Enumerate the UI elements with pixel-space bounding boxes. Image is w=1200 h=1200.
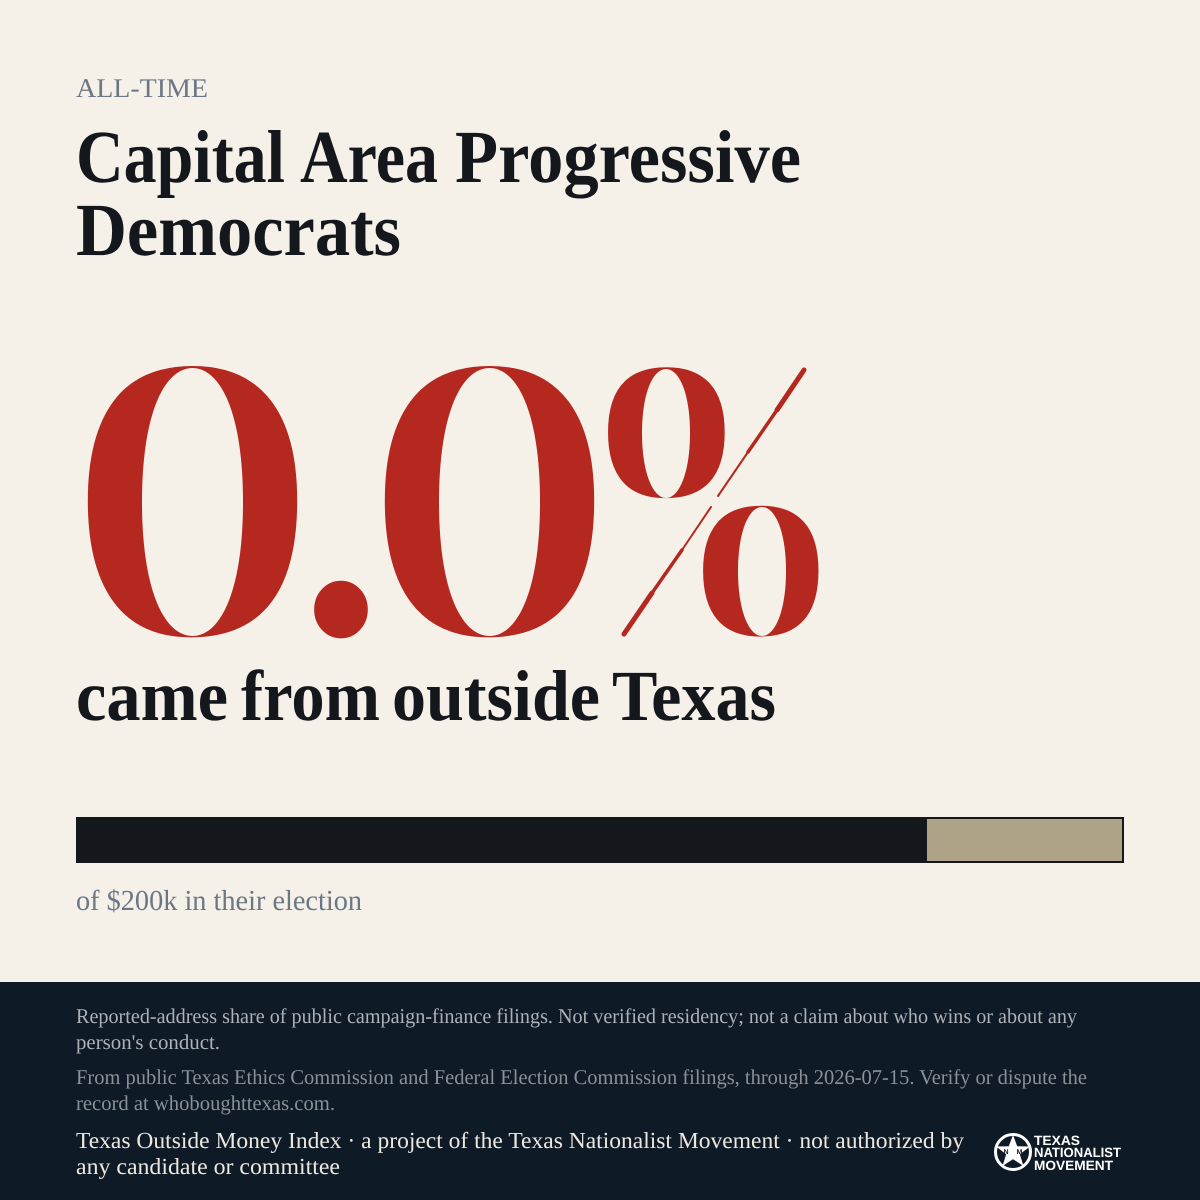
project credit: any candidate or committee xyxy=(76,1154,340,1179)
project credit xyxy=(76,1128,964,1179)
subheading: outside xyxy=(392,656,600,736)
logo wordmark: NATIONALIST xyxy=(1034,1145,1122,1160)
icon: star in circle: N xyxy=(1004,1149,1009,1156)
subheading: Texas xyxy=(612,656,776,736)
source text xyxy=(76,1065,1087,1115)
logo: Texas Nationalist Movement xyxy=(996,1133,1122,1173)
big percentage: . xyxy=(300,317,382,711)
disclaimer text xyxy=(76,1004,1077,1054)
big percentage: 0 xyxy=(366,276,613,722)
progress bar xyxy=(76,817,1124,863)
source text: From public Texas Ethics Commission and Federal Election Commission filings, through 2026-07-15. Verify or dispute the xyxy=(76,1065,1087,1089)
project credit: Texas Outside Money Index · a project of the Texas Nationalist Movement · not authorized by xyxy=(76,1128,964,1153)
footer panel xyxy=(0,982,1200,1200)
title: Progressive xyxy=(455,116,801,199)
source text: record at whoboughttexas.com. xyxy=(76,1091,335,1115)
subheading: from xyxy=(241,656,380,736)
subheading: came xyxy=(76,656,228,736)
eyebrow: time period: ALL-TIME xyxy=(76,73,208,103)
logo wordmark: TEXAS xyxy=(1034,1133,1080,1148)
disclaimer text: Reported-address share of public campaign-finance filings. Not verified residency; not a claim about who wins or about any xyxy=(76,1004,1077,1028)
big percentage: % xyxy=(570,286,937,688)
title: Democrats xyxy=(76,189,401,272)
logo wordmark: MOVEMENT xyxy=(1034,1158,1114,1173)
title: Area xyxy=(300,116,438,199)
icon: star in circle: M xyxy=(1016,1149,1022,1156)
big percentage: % xyxy=(490,310,853,711)
icon: star in circle xyxy=(996,1134,1030,1170)
big percentage xyxy=(88,366,818,638)
subheading xyxy=(76,656,776,736)
title: Capital xyxy=(76,116,285,199)
big percentage: 0 xyxy=(69,276,316,722)
disclaimer text: person's conduct. xyxy=(76,1030,220,1054)
logo wordmark xyxy=(1034,1133,1122,1173)
bar caption: of $200k in their election xyxy=(76,885,362,917)
title xyxy=(76,116,801,272)
